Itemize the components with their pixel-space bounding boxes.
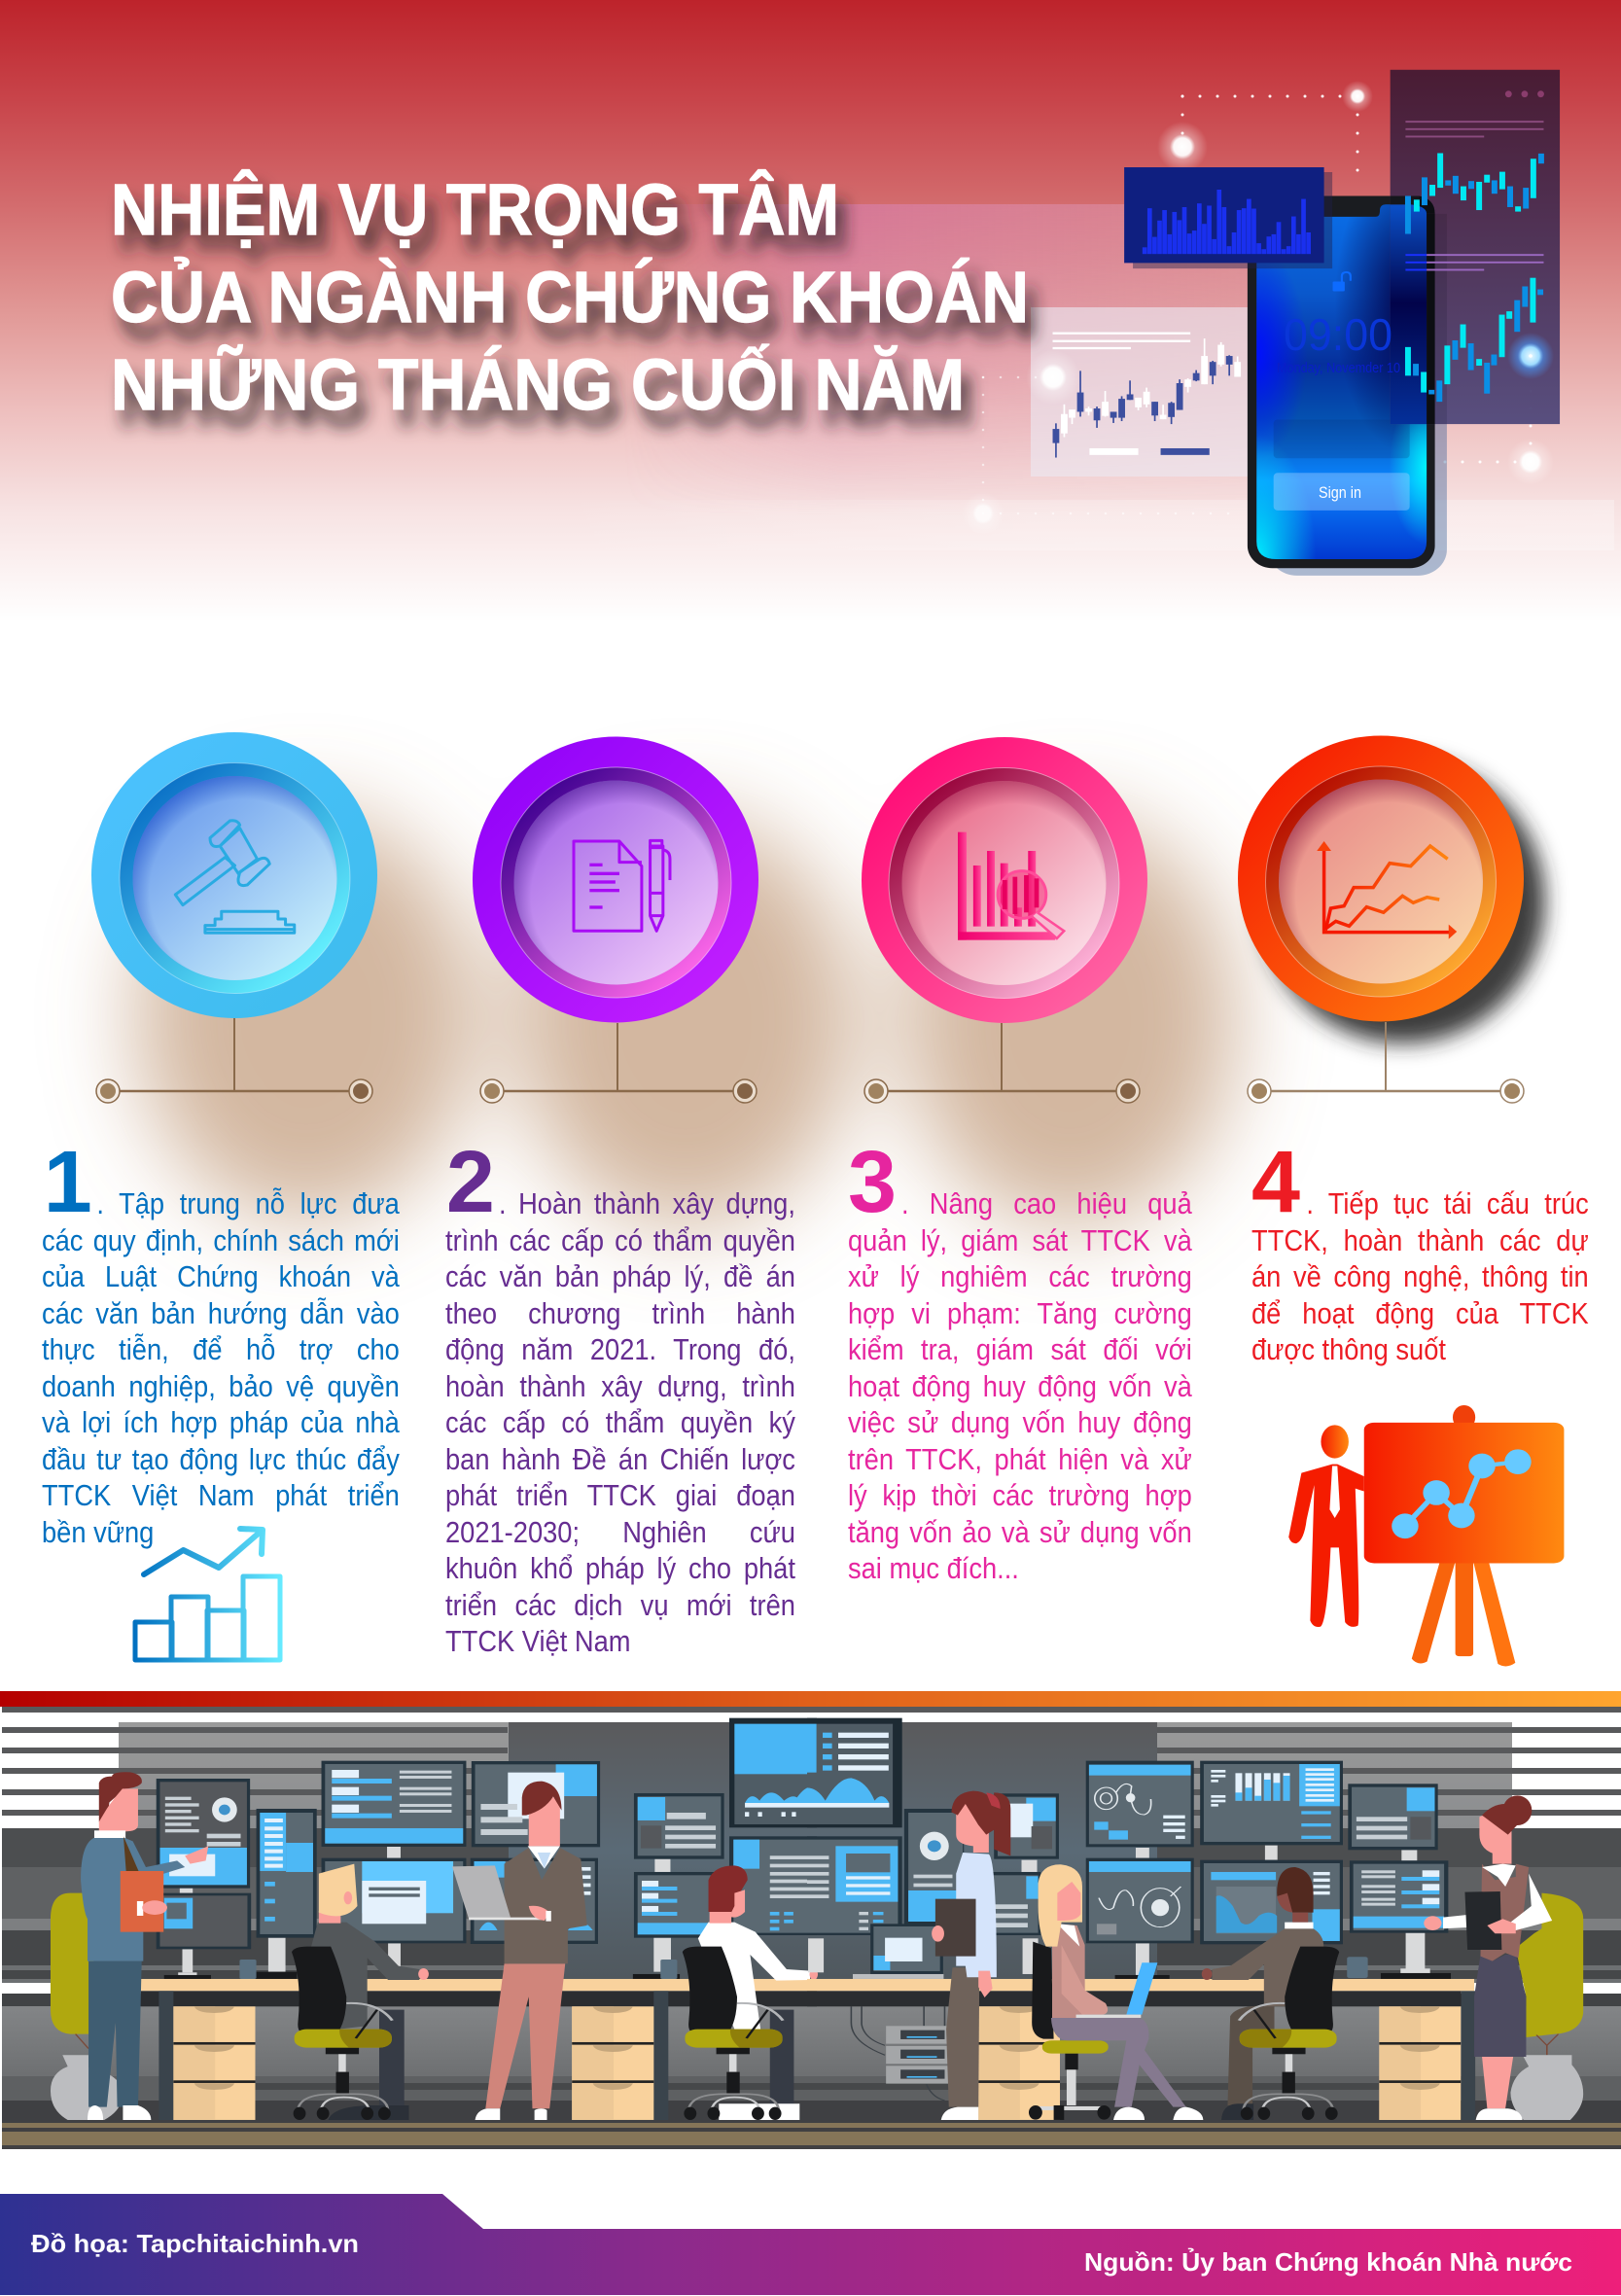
connector 4 [1248,1022,1524,1103]
title: NHỮNG THÁNG CUỐI NĂM [111,344,965,425]
icon: line chart [1317,841,1457,939]
text block 1: và lợi ích hợp pháp của nhà [42,1405,400,1439]
text block 1: đầu tư tạo động lực thúc đẩy [42,1441,400,1476]
circle 3: bar chart with magnifier [862,737,1147,1023]
title: NHIỆM VỤ TRỌNG TÂM [111,169,839,250]
phone clock: 09:00 [1284,309,1392,360]
text block 4: TTCK, hoàn thành các dự [1251,1223,1589,1256]
text block 2: 2021-2030; Nghiên cứu [445,1515,795,1548]
text block 4: để hoạt động của TTCK [1251,1295,1589,1330]
glowing blue node [1507,333,1554,379]
icon: bar chart and magnifier [958,832,1064,940]
connector 3 [864,1023,1140,1103]
desk top [807,1979,1475,2120]
room background [2,1722,1621,2149]
mug [1347,1957,1368,1978]
drawers [572,2006,653,2120]
laptop on desk [853,1924,943,1979]
seated person in white shirt [683,1865,818,2120]
text block 2: khuôn khổ pháp lý cho phát [445,1551,795,1585]
number 1: 1 [44,1134,92,1231]
illustration: dark stock panel with candlesticks [1391,70,1560,424]
monitors right-of-centre group [634,1718,817,1938]
brown soft shadows behind circles 1-3 [136,812,1235,1225]
title: CỦA NGÀNH CHỨNG KHOÁN [111,257,1029,337]
phone body [1248,195,1435,568]
text block 2: theo chương trình hành [445,1295,795,1330]
footer source right: Nguồn: Ủy ban Chứng khoán Nhà nước [1084,2246,1572,2277]
server rack and cables [851,2006,954,2101]
title [111,169,1029,425]
footer credit left: Đồ họa: Tapchitaichinh.vn [31,2229,359,2258]
header pale overlay panels [680,204,1614,504]
text block 1: bền vững [42,1515,154,1548]
text block 3: quản lý, giám sát TTCK và [848,1223,1192,1256]
text block 3: hoạt động huy động vốn và [848,1369,1192,1402]
circle 4: line chart [1238,735,1524,1021]
seated blond person [292,1864,429,2120]
text block 2: động năm 2021. Trong đó, [445,1332,795,1366]
icon: rising bars and arrow (item 1) [135,1529,280,1660]
text block 3: sai mục đích... [848,1551,1019,1585]
connector 2 [480,1023,757,1103]
illustration: stock trading control room [2,1718,1621,2149]
illustration: blue bar chart panel [1124,167,1332,268]
desk top [141,1979,817,2120]
right plant and vase [1510,1893,1583,2120]
seated man with brown jacket [1202,1867,1339,2120]
icon: gavel [175,821,295,933]
drawers [173,2006,255,2120]
text block 2 [445,1134,795,1658]
text block 2: các văn bản pháp lý, đề án [445,1259,795,1293]
seated blonde woman with laptop [1029,1864,1203,2120]
phone date: Monday, Novemder 10 [1277,360,1400,376]
man with folder [81,1772,208,2120]
text block 2: phát triển TTCK giai đoạn [445,1478,795,1512]
text block 1: thực tiễn, để hỗ trợ cho [42,1332,400,1366]
text block 1: . Tập trung nỗ lực đưa [96,1186,400,1220]
icon: presenter with board (item 4) [1288,1405,1564,1666]
mugs [239,1960,677,1979]
text block 3: kiểm tra, giám sát đối với [848,1332,1192,1366]
number 4: 4 [1251,1134,1300,1231]
text block 1 [42,1134,400,1548]
text block 1: các quy định, chính sách mới [42,1223,400,1256]
text block 3: . Nâng cao hiệu quả [901,1186,1192,1220]
connector 1 [96,1018,372,1103]
monitors centre group [322,1761,600,1944]
text block 3: xử lý nghiêm các trường [848,1259,1192,1293]
text block 3: hợp vi phạm: Tăng cường [848,1295,1192,1330]
footer band [0,2194,1621,2295]
icon: unlocked padlock [1333,272,1351,291]
phone shadow [1268,204,1447,576]
text block 2: ban hành Đề án Chiến lược [445,1441,795,1476]
icon: document and pen [574,840,670,931]
text block 1: doanh nghiệp, bảo vệ quyền [42,1369,400,1402]
circle 1: law gavel [91,732,377,1018]
illustration: candlestick chart on pale panel [1053,333,1241,458]
standing woman with clipboard [932,1791,1010,2120]
text block 2: hoàn thành xây dựng, trình [445,1369,795,1402]
number 3: 3 [848,1134,897,1231]
text block 2: TTCK Việt Nam [445,1624,631,1658]
text block 3: tăng vốn ảo và sử dụng vốn [848,1515,1192,1548]
number 2: 2 [446,1134,495,1231]
drawers [978,2006,1060,2120]
right half of room [807,1718,1583,2120]
monitor stands [164,1847,680,1979]
dotted connector lines and glowing nodes [962,81,1554,535]
text block 3: việc sử dụng vốn huy động [848,1405,1192,1439]
gradient divider strip [0,1691,1621,1713]
text block 4: được thông suốt [1251,1332,1446,1366]
text block 4: . Tiếp tục tái cấu trúc [1306,1186,1589,1220]
illustration: smartphone [1248,195,1447,576]
text block 4: án về công nghệ, thông tin [1251,1259,1589,1293]
phone sign in label: Sign in [1319,483,1361,502]
monitors [807,1718,1448,1944]
standing woman with dark clipboard [1424,1795,1552,2120]
text block 1: các văn bản hướng dẫn vào [42,1295,400,1330]
left plant and vase [51,1893,123,2120]
dark shadow behind circle 4 [1261,759,1545,1043]
text block 3 [848,1134,1192,1585]
text block 2: các cấp có thẩm quyền ký [445,1405,795,1439]
text block 4 [1251,1134,1589,1366]
man with laptop [452,1782,587,2120]
text block 1: của Luật Chứng khoán và [42,1259,400,1293]
header gradient background [0,0,1621,622]
text block 2: . Hoàn thành xây dựng, [499,1186,795,1220]
circle 2: document and pen [473,737,758,1023]
phone screen [1256,204,1427,559]
text block 2: trình các cấp có thẩm quyền [445,1223,795,1256]
text block 1: TTCK Việt Nam phát triển [42,1478,400,1512]
text block 3: lý kịp thời các trường hợp [848,1478,1192,1512]
drawers [1379,2006,1461,2120]
left half of room [51,1718,818,2120]
text block 3: trên TTCK, phát hiện và xử [848,1441,1192,1476]
monitors left group [157,1779,317,1949]
text block 2: triển các dịch vụ mới trên [445,1587,795,1622]
monitor stands [808,1846,1451,1979]
